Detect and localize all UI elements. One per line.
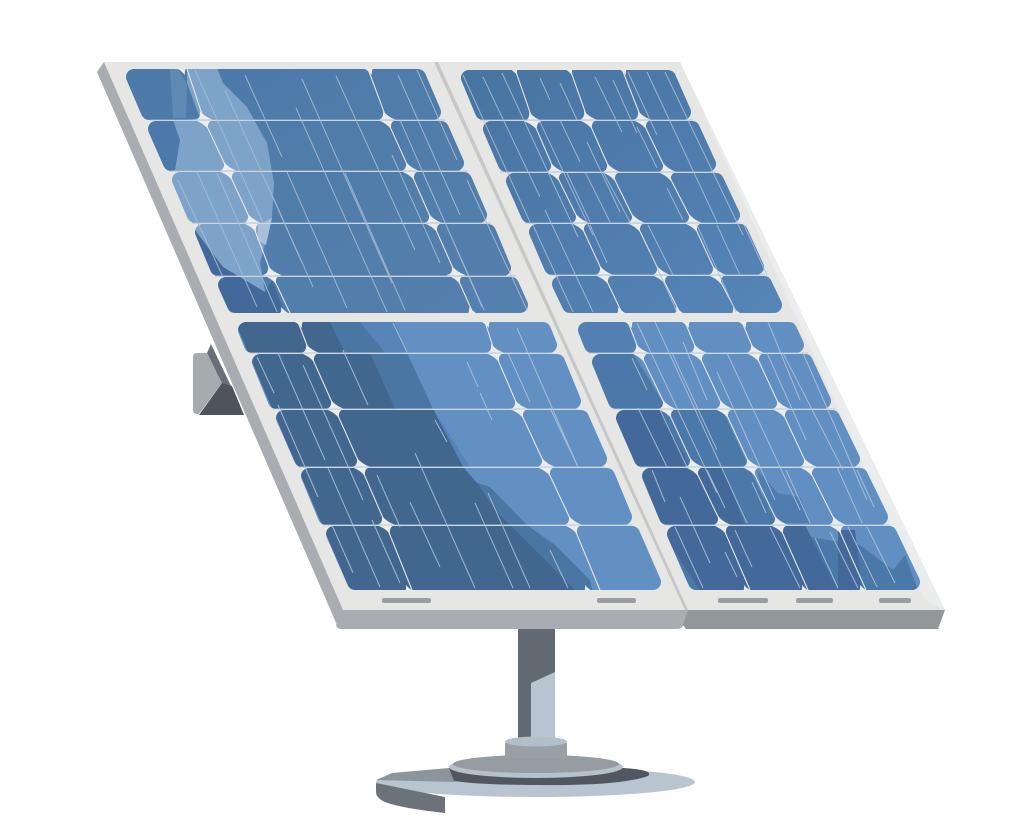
junction slots [382,598,911,603]
rear bracket [193,344,244,415]
frame left edge [97,62,345,625]
illustration: solar panel on a stand [97,62,945,813]
frame face [104,62,945,610]
stand pole [518,628,555,740]
base left recess [376,768,455,782]
panel: lower left [238,322,661,590]
base plate [449,756,623,778]
panel: lower right [578,322,920,590]
frame centre divider [434,62,688,610]
base front wedge [376,783,445,813]
panel frame [97,62,945,629]
lower left grid lines [250,323,632,588]
pole collar [505,743,567,758]
lower right grid lines [588,322,895,588]
base inner shadow [449,768,649,785]
stand base [376,736,695,813]
frame right highlight [680,62,945,610]
panel: upper right [461,70,782,313]
base disc [376,767,695,797]
frame bottom edge left [336,610,688,629]
panel: upper left [126,69,528,313]
frame bottom edge right [683,610,945,629]
upper left grid lines [150,70,527,312]
upper right grid lines [463,72,767,312]
